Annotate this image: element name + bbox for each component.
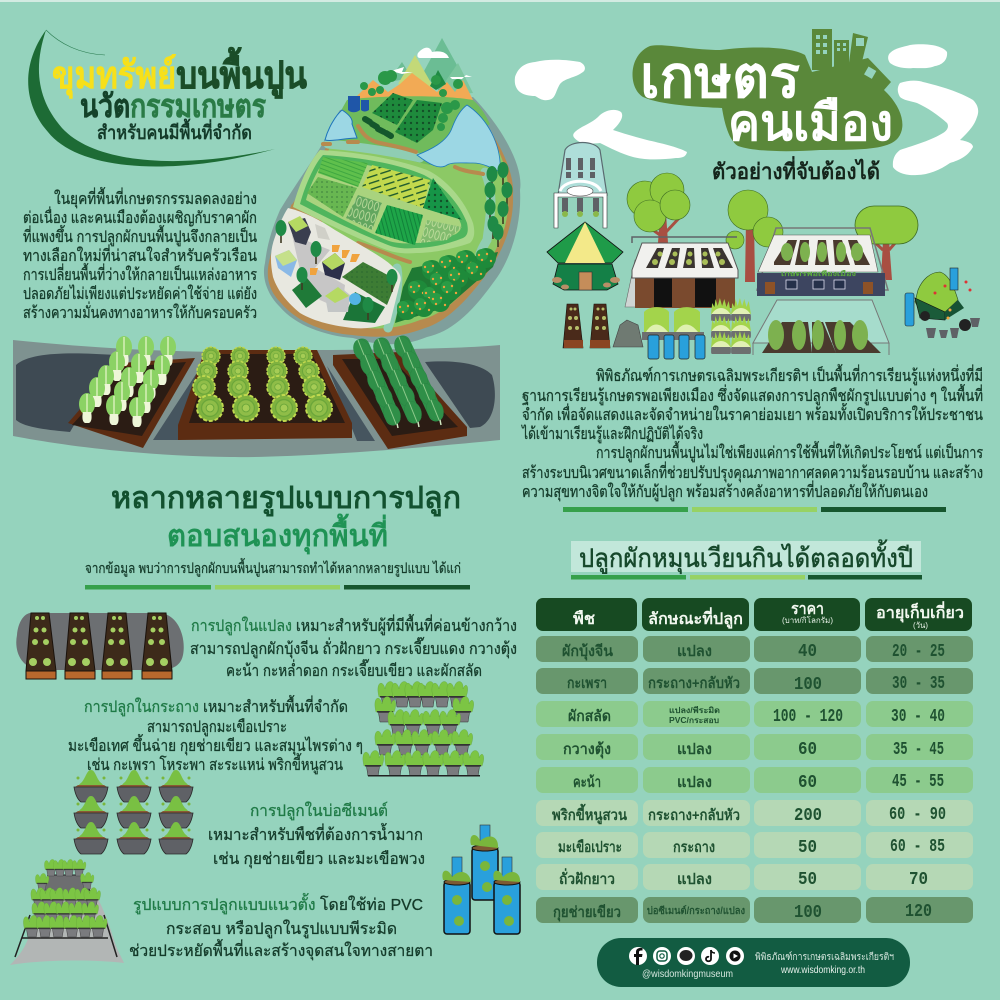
table header: (วัน) xyxy=(913,621,928,630)
table header: พืช xyxy=(573,610,595,628)
title line 2: นวัตกรรมเกษตร xyxy=(80,88,266,124)
row: กุยช่ายเขียว: 120 xyxy=(905,902,932,922)
buildings xyxy=(812,29,868,75)
text block: cement ring planting: การปลูกในบ่อซีเมนต์ xyxy=(250,801,388,821)
text block: intro left xyxy=(23,187,257,322)
row: กุยช่ายเขียว: 100 xyxy=(794,903,822,923)
icon: cement ring pots xyxy=(74,770,193,854)
tree row xyxy=(484,162,512,247)
lower greenhouse xyxy=(753,300,889,355)
table header: ลักษณะที่ปลูก xyxy=(648,607,743,630)
text block: intro left: ทางเลือกใหม่ที่น่าสนใจสำหรับครัวเรือน xyxy=(23,244,257,265)
heading: planting variety: หลากหลายรูปแบบการปลูก xyxy=(111,482,461,517)
table header xyxy=(536,598,972,631)
row: พริกขี้หนูสวน: 200 xyxy=(794,806,822,826)
text block: pot planting: เช่น กะเพรา โหระพา สะระแหน่ พริกขี้หนูสวน xyxy=(87,753,343,775)
blue tubes xyxy=(648,335,705,359)
text block: cement ring planting: เหมาะสำหรับพืชที่ต้องการน้ำมาก xyxy=(208,823,423,844)
text block: bed planting: การปลูกในแปลง เหมาะสำหรับผู้ที่มีพื้นที่ค่อนข้างกว้าง xyxy=(191,614,517,636)
icon: blue vertical tubes xyxy=(442,825,520,934)
row: กะเพรา: กะเพรา xyxy=(567,675,607,692)
table header: ราคา xyxy=(791,601,824,618)
text block: vertical planting: รูปแบบการปลูกแบบแนวตั้ง โดยใช้ท่อ PVC xyxy=(133,893,423,915)
text block: cement ring planting: เช่น กุยช่ายเขียว และมะเขือพวง xyxy=(213,850,425,869)
row: คะน้า: 45 - 55 xyxy=(892,772,944,792)
subtitle: ตัวอย่างที่จับต้องได้ xyxy=(712,155,880,184)
text block: intro left: การเปลี่ยนพื้นที่ว่างให้กลายเป็นแหล่งอาหาร xyxy=(23,263,257,284)
row: ถั่วฝักยาว: แปลง xyxy=(677,871,712,888)
footer: contact pill xyxy=(597,938,910,987)
row: ผักสลัด: แปลง/พีระมิด xyxy=(669,705,720,715)
swoosh around title xyxy=(28,30,275,166)
text block: vertical planting: ช่วยประหยัดพื้นที่และสร้างจุดสนใจทางสายตา xyxy=(129,939,433,961)
row: ผักบุ้งจีน: 40 xyxy=(798,642,817,662)
clouds xyxy=(515,44,978,175)
small pyramid xyxy=(613,320,643,347)
row: ผักสลัด: 100 - 120 xyxy=(773,707,843,727)
row: กวางตุ้ง: แปลง xyxy=(677,741,712,758)
text block: bed planting: คะน้า กะหล่ำดอก กระเจี๊ยบเขียว และผักสลัด xyxy=(226,659,482,680)
row: คะน้า: แปลง xyxy=(677,774,712,791)
building 2: เกษตรพอเพียงเมือง xyxy=(781,270,857,278)
text block: cement ring planting xyxy=(208,801,425,869)
brown embankments xyxy=(293,126,483,262)
text block: intro left: สร้างความมั่นคงทางอาหารให้กับครอบครัว xyxy=(23,301,257,322)
row: คะน้า xyxy=(536,767,973,793)
row: พริกขี้หนูสวน xyxy=(536,800,973,826)
illustration: farm island xyxy=(264,38,520,344)
heading: year-round crops: ปลูกผักหมุนเวียนกินได้ตลอดทั้งปี xyxy=(579,539,913,574)
text block: intro left: ปลอดภัยไม่เพียงแต่ประหยัดค่าใช้จ่าย แต่ยัง xyxy=(23,284,257,303)
row: กุยช่ายเขียว: บ่อซีเมนต์/กระถาง/แปลง xyxy=(647,905,745,917)
bed 1: bok choy xyxy=(68,336,195,448)
row: กะเพรา: กระถาง+กลับหัว xyxy=(648,675,740,692)
water channels xyxy=(328,144,491,328)
text block: intro left: ในยุคที่พื้นที่เกษตรกรรมลดลงอย่าง xyxy=(54,187,257,209)
text block: vertical planting: กระสอบ หรือปลูกในรูปแบบพีระมิด xyxy=(166,919,397,939)
building 2 xyxy=(757,228,888,296)
row: ผักบุ้งจีน: 20 - 25 xyxy=(892,642,945,662)
text block: bed planting xyxy=(190,614,517,680)
bed towers xyxy=(563,304,610,348)
row: กวางตุ้ง: กวางตุ้ง xyxy=(563,741,611,759)
row: ผักสลัด: 30 - 40 xyxy=(891,707,945,727)
illustration: urban farm buildings xyxy=(547,142,980,359)
title line 3: สำหรับคนมีพื้นที่จำกัด xyxy=(97,118,252,144)
table header: (บาท/กิโลกรัม) xyxy=(782,615,833,625)
row: กุยช่ายเขียว xyxy=(536,897,973,923)
pond xyxy=(325,110,357,141)
row: ผักสลัด xyxy=(536,701,973,727)
row: กวางตุ้ง: 35 - 45 xyxy=(893,740,944,760)
row: พริกขี้หนูสวน: 60 - 90 xyxy=(889,805,946,825)
trees on top xyxy=(360,70,463,131)
text block: intro left: ที่แพงขึ้น การปลูกผักบนพื้นปูนจึงกลายเป็น xyxy=(23,225,257,247)
row: กวางตุ้ง xyxy=(536,734,973,760)
text block: intro left: ต่อเนื่อง และคนเมืองต้องเผชิญกับราคาผัก xyxy=(23,206,257,227)
footer: contact pill: @wisdomkingmuseum xyxy=(642,969,733,980)
island base xyxy=(264,97,520,344)
row: มะเขือเปราะ: กระถาง xyxy=(673,839,715,856)
text block: pot planting: การปลูกในกระถาง เหมาะสำหรับพื้นที่จำกัด xyxy=(84,695,348,717)
illustration: raised vegetable beds xyxy=(13,334,500,457)
row: มะเขือเปราะ: 50 xyxy=(798,838,817,858)
grey band xyxy=(13,340,500,457)
row: กะเพรา: 30 - 35 xyxy=(892,674,945,694)
row: กุยช่ายเขียว: กุยช่ายเขียว xyxy=(553,904,621,922)
logo text: เกษตร xyxy=(640,45,800,110)
row: พริกขี้หนูสวน: กระถาง+กลับหัว xyxy=(648,807,740,824)
text block: pot planting: สามารถปลูกมะเขือเปราะ xyxy=(147,718,287,737)
sprout pots xyxy=(711,298,751,354)
text block: pot planting xyxy=(68,695,363,775)
row: มะเขือเปราะ xyxy=(536,832,973,858)
social icons xyxy=(629,947,744,965)
row: พริกขี้หนูสวน: พริกขี้หนูสวน xyxy=(552,803,628,825)
row: กะเพรา xyxy=(536,668,973,695)
orchard xyxy=(395,252,498,323)
terrace crops xyxy=(372,93,413,125)
garden cart xyxy=(905,268,980,338)
bed 2: lettuce xyxy=(178,347,352,440)
row: ถั่วฝักยาว: ถั่วฝักยาว xyxy=(559,868,615,888)
panel: left title group xyxy=(28,30,307,166)
upper green land xyxy=(327,96,490,165)
main field xyxy=(293,150,474,253)
heading: planting variety xyxy=(85,482,470,590)
row: คะน้า: คะน้า xyxy=(573,774,601,791)
title line 1: ขุมทรัพย์บนพื้นปูน xyxy=(52,47,307,99)
mountains xyxy=(423,38,468,92)
row: คะน้า: 60 xyxy=(798,773,817,793)
text block: museum description: ได้เข้ามาเรียนรู้และฝึกปฏิบัติได้จริง xyxy=(520,424,703,444)
row: ถั่วฝักยาว: 70 xyxy=(909,870,928,890)
footer: contact pill: www.wisdomking.or.th xyxy=(780,965,865,976)
icon: raised beds xyxy=(16,613,184,679)
city panel xyxy=(271,208,401,328)
mushroom tent xyxy=(547,222,623,290)
title: urban farming logo: คนเมือง xyxy=(728,95,893,151)
dome greenhouse xyxy=(554,142,607,228)
text block: bed planting: สามารถปลูกผักบุ้งจีน ถั่วฝักยาว กระเจี๊ยบแดง กวางตุ้ง xyxy=(190,637,517,659)
title: urban farming logo xyxy=(515,29,978,184)
row: ผักบุ้งจีน: ผักบุ้งจีน xyxy=(562,643,614,661)
bed 3: kale xyxy=(333,334,467,449)
row: ผักสลัด: PVC/กระสอบ xyxy=(669,716,719,725)
row: ถั่วฝักยาว: 50 xyxy=(798,870,817,890)
icon: pot rack xyxy=(363,682,484,776)
tree middle xyxy=(726,190,783,282)
building 1 xyxy=(625,237,738,308)
row: กวางตุ้ง: 60 xyxy=(798,740,817,760)
mountain clouds xyxy=(417,48,449,58)
sub-heading: ตอบสนองทุกพื้นที่ xyxy=(167,513,388,555)
row: ถั่วฝักยาว xyxy=(536,864,973,890)
text block: museum description xyxy=(520,364,983,512)
row: ผักบุ้งจีน: แปลง xyxy=(677,643,712,660)
lake xyxy=(417,105,500,172)
intro sentence: จากข้อมูล พบว่าการปลูกผักบนพื้นปูนสามารถทำได้หลากหลายรูปแบบ ได้แก่ xyxy=(85,558,461,577)
icon: pyramid planter xyxy=(10,859,124,965)
text block: vertical planting xyxy=(129,893,433,961)
heading: year-round crops xyxy=(571,539,922,580)
row: ผักสลัด: ผักสลัด xyxy=(568,708,611,725)
table header: อายุเก็บเกี่ยว xyxy=(876,601,964,623)
footer: contact pill: พิพิธภัณฑ์การเกษตรเฉลิมพระเกียรติฯ xyxy=(755,951,894,963)
water tanks xyxy=(348,96,369,112)
row: มะเขือเปราะ: มะเขือเปราะ xyxy=(558,839,622,856)
row: ผักบุ้งจีน xyxy=(536,636,973,662)
row: กะเพรา: 100 xyxy=(794,675,822,695)
logo blob xyxy=(633,45,902,151)
tree left xyxy=(627,173,690,243)
tree right xyxy=(855,206,918,280)
table: crops xyxy=(536,598,973,923)
row: มะเขือเปราะ: 60 - 85 xyxy=(890,837,945,857)
text block: pot planting: มะเขือเทศ ขึ้นฉ่าย กุยช่ายเขียว และสมุนไพรต่าง ๆ xyxy=(68,734,363,756)
sprout boxes xyxy=(642,307,704,340)
